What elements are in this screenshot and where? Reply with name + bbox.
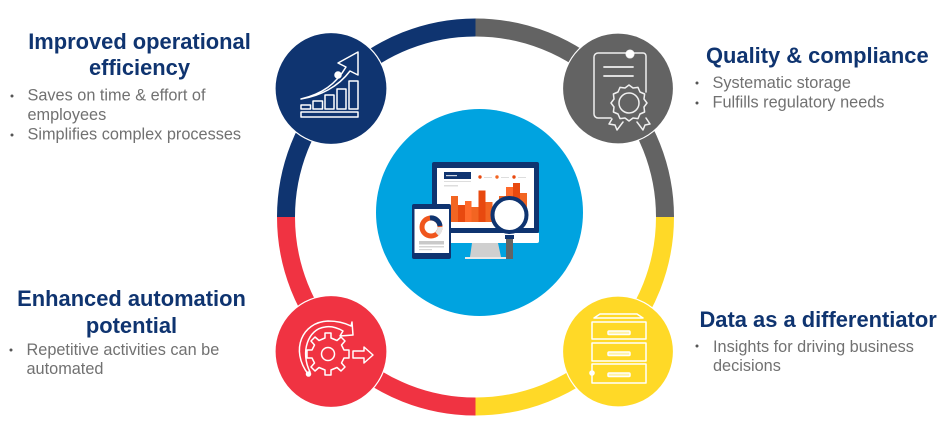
icon: magnifying glass	[492, 198, 526, 259]
bullet list: efficiency benefits	[10, 86, 241, 144]
text block: improved operational efficiency	[10, 29, 251, 144]
red badge with automation gear icon	[275, 296, 387, 408]
bullet list: quality benefits: Fulfills regulatory needs	[712, 94, 884, 112]
icon: certificate with seal	[594, 50, 650, 130]
icon: rising bars and arrow	[301, 52, 358, 117]
bullet list: efficiency benefits: Simplifies complex processes	[28, 126, 241, 144]
bullet list: quality benefits: Systematic storage	[712, 74, 851, 92]
heading: quality and compliance: Quality & compliance	[706, 43, 929, 68]
ring: four coloured quadrants	[286, 28, 665, 406]
heading: improved operational efficiency: efficiency	[89, 55, 191, 80]
icon: filing cabinet	[589, 314, 646, 383]
bullet list: automation benefits	[10, 341, 219, 378]
central blue circle with dashboard icon	[376, 109, 583, 316]
bullet list: data benefits: decisions	[713, 357, 781, 375]
yellow badge with filing cabinet icon	[562, 296, 674, 407]
heading: data as a differentiator: Data as a differentiator	[700, 307, 937, 332]
bullet list: efficiency benefits: employees	[28, 106, 106, 124]
bullet list: data benefits: Insights for driving business	[713, 338, 914, 356]
bullet list: quality benefits	[696, 74, 884, 112]
text block: enhanced automation potential	[10, 286, 246, 378]
text block: data as a differentiator	[696, 307, 937, 375]
bullet list: automation benefits: Repetitive activities can be	[26, 341, 219, 359]
heading: enhanced automation potential: Enhanced automation	[17, 286, 246, 311]
icon: desktop monitor with bar chart	[432, 162, 539, 259]
gray badge with certificate icon	[562, 33, 674, 144]
icon: tablet with donut chart	[412, 204, 451, 259]
bullet list: data benefits	[696, 338, 914, 375]
heading: enhanced automation potential: potential	[86, 313, 177, 338]
icon: gear with circular and right arrows	[299, 321, 373, 376]
navy badge with growth chart icon	[275, 32, 387, 144]
bullet list: automation benefits: automated	[26, 360, 103, 378]
text block: quality and compliance	[696, 43, 929, 112]
heading: improved operational efficiency: Improved operational	[28, 29, 251, 54]
bullet list: efficiency benefits: Saves on time & effort of	[28, 86, 206, 104]
